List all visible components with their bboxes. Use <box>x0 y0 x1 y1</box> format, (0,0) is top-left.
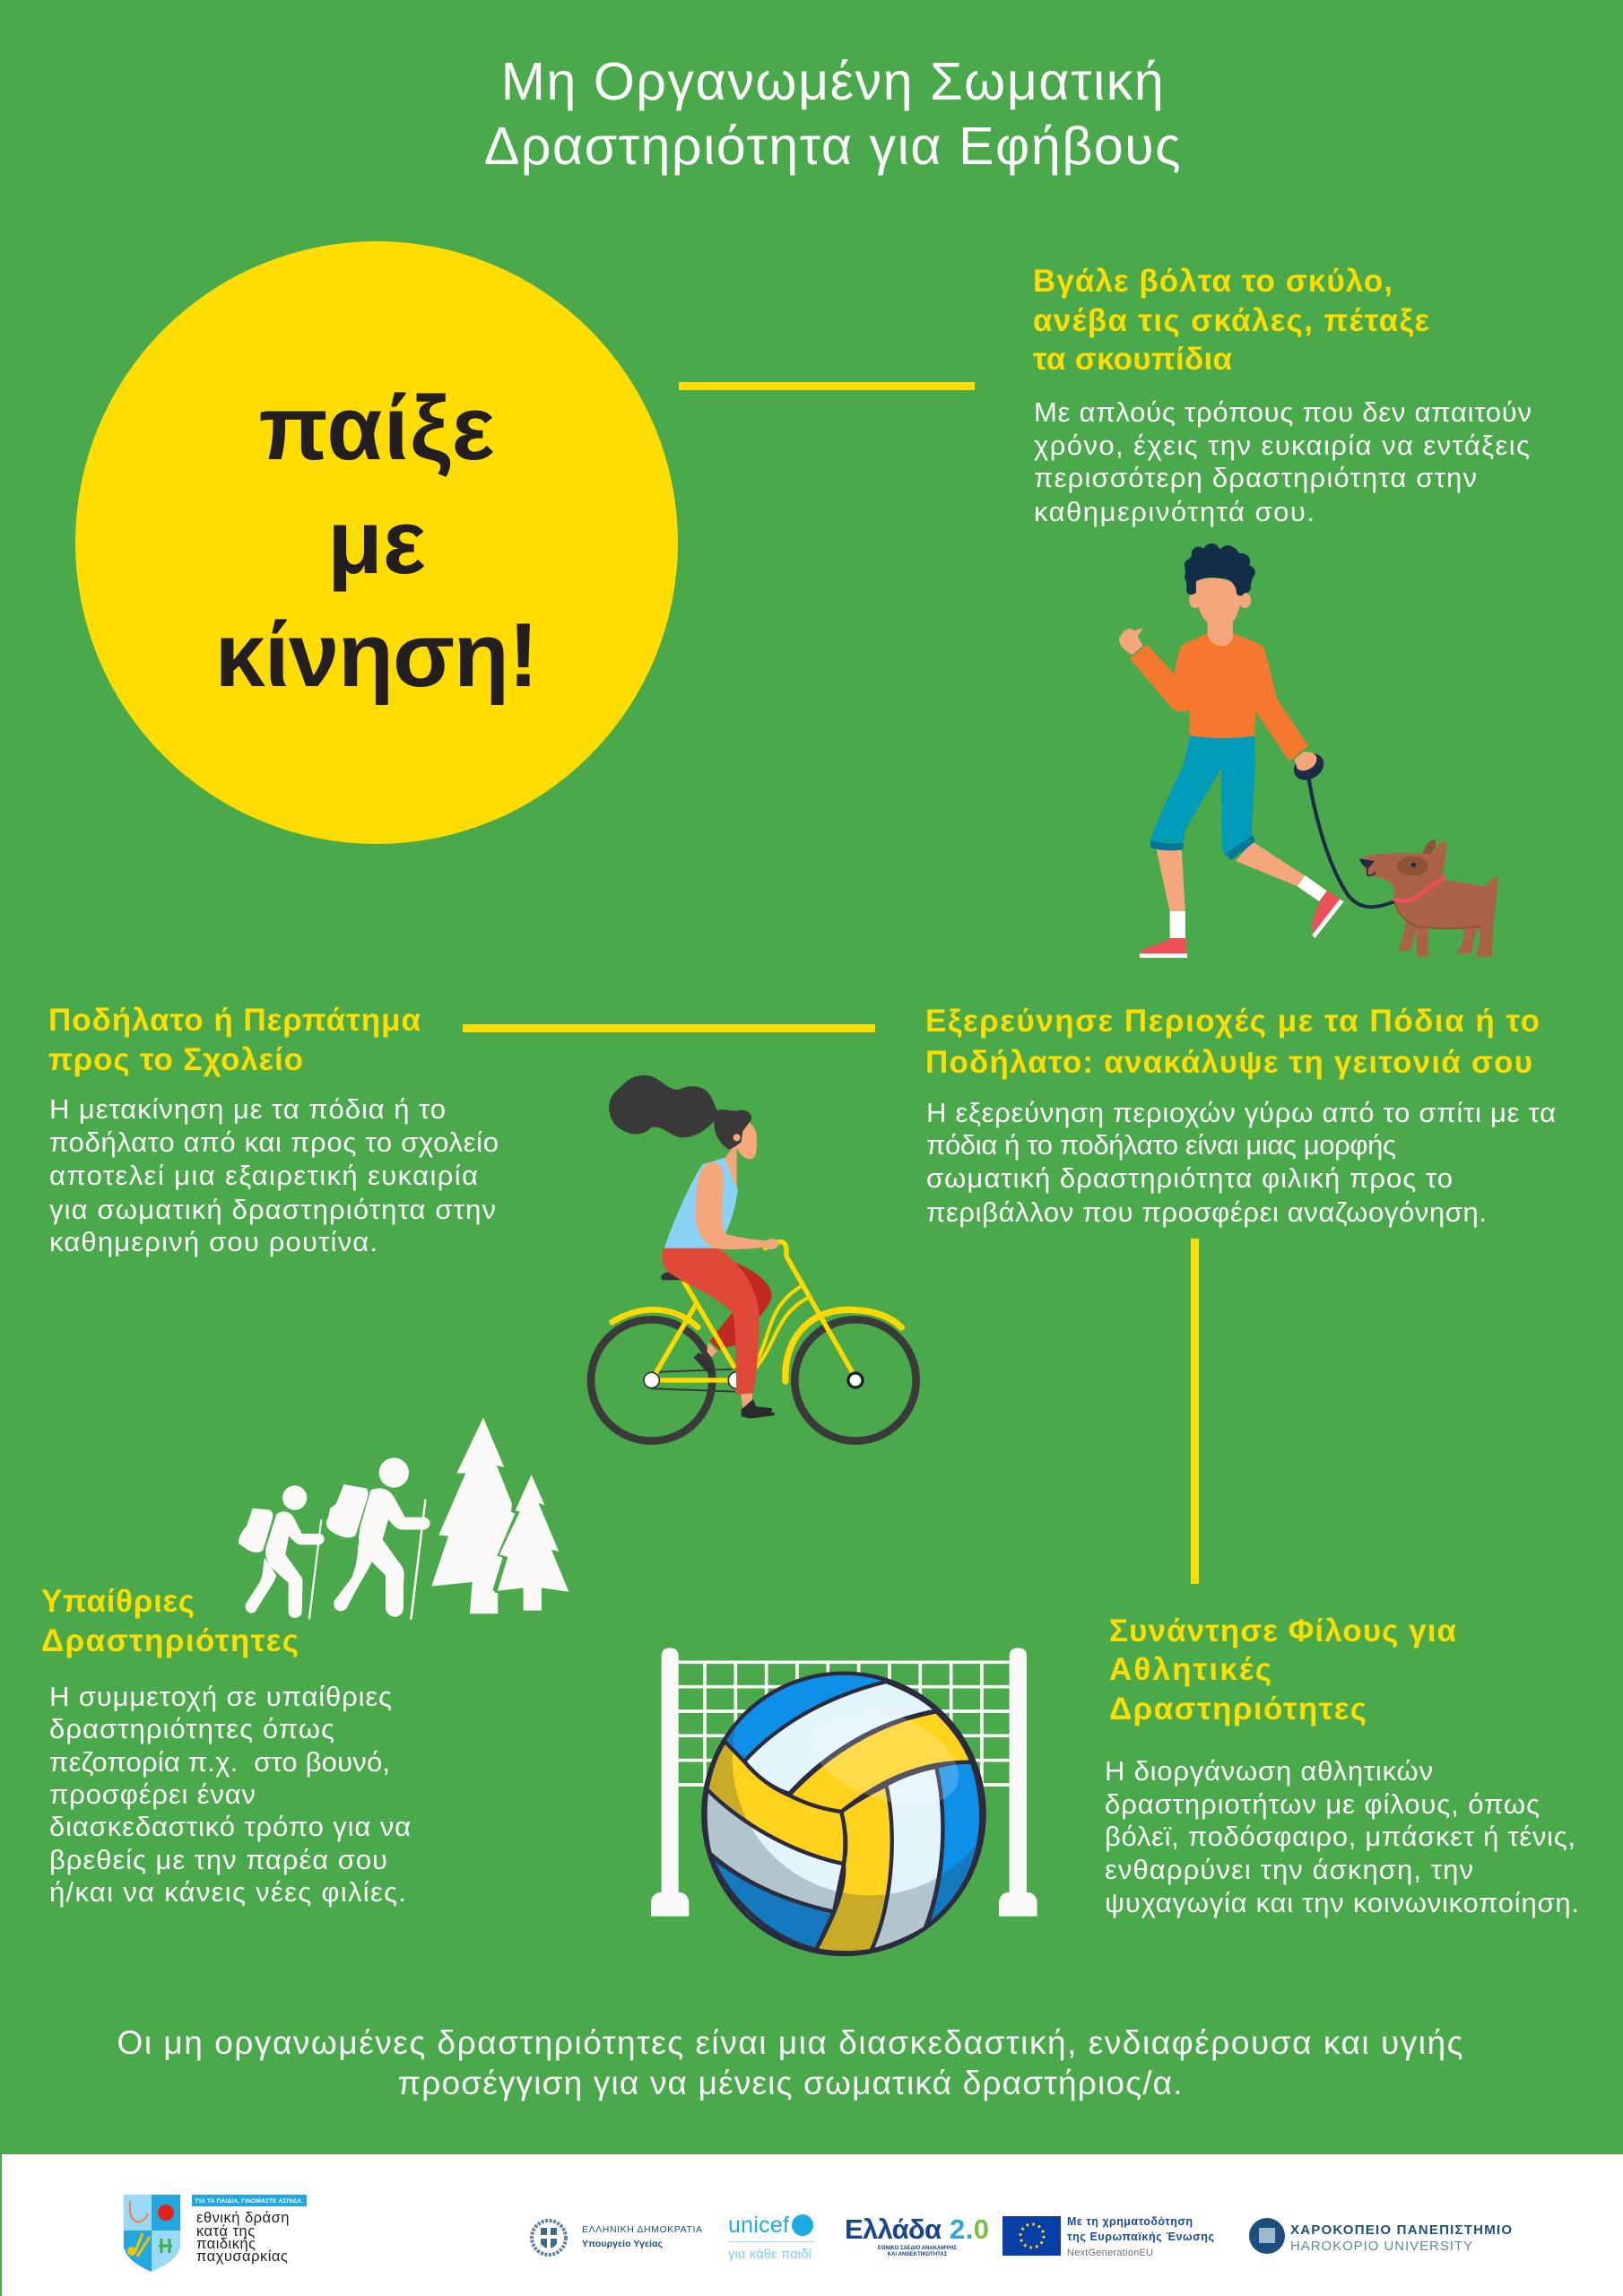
connector line: circle to walk the dog <box>679 382 975 390</box>
heading: sports with friends <box>1109 1613 1456 1726</box>
small hiker <box>282 1485 307 1510</box>
logo: ministry of health text: ΕΛΛΗΝΙΚΗ ΔΗΜΟΚΡΑΤΙΑ <box>582 2224 702 2235</box>
yellow circle headline: κίνηση! <box>215 605 538 706</box>
head and arm skin <box>1208 616 1233 646</box>
logo: EU funding text <box>1067 2215 1214 2258</box>
title <box>484 52 1182 176</box>
legs <box>1157 849 1185 912</box>
heading: outdoor activities <box>41 1584 299 1658</box>
logo: unicef <box>728 2213 814 2262</box>
text block: outdoor activities: πεζοπορία π.χ. στο βουνό, <box>49 1746 390 1778</box>
icon: volleyball and net <box>651 1648 1037 1957</box>
logo: national action text <box>192 2195 307 2265</box>
text block: outdoor activities: διασκεδαστικό τρόπο για να <box>49 1811 411 1842</box>
hair <box>609 1075 751 1150</box>
large hiker <box>379 1457 409 1488</box>
heading: walk the dog: Βγάλε βόλτα το σκύλο, <box>1033 264 1393 299</box>
text block: cycling to school: καθημερινή σου ρουτίνα. <box>49 1226 378 1257</box>
closing statement: Οι μη οργανωμένες δραστηριότητες είναι μια διασκεδαστική, ενδιαφέρουσα και υγιής <box>117 2024 1463 2061</box>
text block: sports with friends: ενθαρρύνει την άσκηση, την <box>1105 1854 1473 1885</box>
heading: sports with friends: Συνάντησε Φίλους για <box>1109 1613 1456 1648</box>
text block: sports with friends <box>1105 1755 1579 1918</box>
text block: outdoor activities: βρεθείς με την παρέα σου <box>49 1844 387 1875</box>
text block: explore neighbourhood: πόδια ή το ποδήλατο είναι μιας μορφής <box>926 1129 1396 1161</box>
logo: Harokopio text <box>1290 2222 1512 2254</box>
panel: cycling or walking to school text <box>48 1003 499 1257</box>
footer band <box>2 2154 1623 2296</box>
heading: walk the dog: ανέβα τις σκάλες, πέταξε <box>1033 303 1429 338</box>
logo: Harokopio seal <box>1249 2218 1285 2254</box>
saddle <box>661 1273 684 1280</box>
text block: outdoor activities <box>49 1681 411 1908</box>
icon: person walking a dog <box>1119 544 1497 958</box>
far leg <box>710 1258 772 1350</box>
title: Δραστηριότητα για Εφήβους <box>484 117 1182 176</box>
logo: EU funding text: Με τη χρηματοδότηση <box>1067 2215 1193 2228</box>
heading: explore neighbourhood: Ποδήλατο: ανακάλυψε τη γειτονιά σου <box>925 1045 1532 1080</box>
text block: walk the dog <box>1034 396 1532 527</box>
text block: explore neighbourhood: Η εξερεύνηση περιοχών γύρω από το σπίτι με τα <box>926 1097 1556 1128</box>
logo: ministry of health text <box>582 2224 702 2249</box>
text block: explore neighbourhood: σωματική δραστηριότητα φιλική προς το <box>926 1162 1453 1194</box>
logo: ministry of health text: Υπουργείο Υγείας <box>582 2239 664 2249</box>
logo: Harokopio text: HAROKOPIO UNIVERSITY <box>1290 2239 1472 2254</box>
icon: hikers and trees <box>239 1418 570 1620</box>
text block: walk the dog: Με απλούς τρόπους που δεν απαιτούν <box>1034 396 1532 428</box>
text block: walk the dog: χρόνο, έχεις την ευκαιρία να εντάξεις <box>1034 430 1530 461</box>
text block: sports with friends: βόλεϊ, ποδόσφαιρο, μπάσκετ ή τένις, <box>1105 1821 1575 1852</box>
text block: sports with friends: Η διοργάνωση αθλητικών <box>1105 1755 1433 1787</box>
heading: explore neighbourhood <box>925 1004 1540 1080</box>
closing statement <box>117 2024 1463 2101</box>
panel: explore neighbourhood text <box>925 1004 1556 1228</box>
heading: walk the dog: τα σκουπίδια <box>1033 342 1232 377</box>
logo: unicef: για κάθε παιδί <box>728 2247 812 2262</box>
logo: national action shield <box>124 2195 180 2272</box>
logo: national action text: παχυσαρκίας <box>196 2248 288 2265</box>
logo: national action text: εθνική δράση <box>196 2210 290 2226</box>
text block: explore neighbourhood: περιβάλλον που προσφέρει αναζωογόνηση. <box>926 1196 1487 1228</box>
near leg <box>741 1392 752 1408</box>
heading: walk the dog <box>1033 264 1429 377</box>
shirt <box>1130 633 1308 761</box>
text block: outdoor activities: δραστηριότητες όπως <box>49 1713 334 1744</box>
panel: outdoor activities text <box>41 1584 411 1908</box>
panel: sports with friends text <box>1105 1613 1579 1918</box>
heading: sports with friends: Δραστηριότητες <box>1109 1692 1367 1726</box>
title: Μη Οργανωμένη Σωματική <box>501 52 1165 111</box>
text block: sports with friends: δραστηριοτήτων με φίλους, όπως <box>1105 1788 1540 1820</box>
hair <box>1185 544 1255 596</box>
logo: national action text: κατά της <box>196 2223 256 2239</box>
closing statement: προσέγγιση για να μένεις σωματικά δραστήριος/α. <box>398 2065 1182 2101</box>
heading: cycling to school: προς το Σχολείο <box>48 1042 303 1077</box>
heading: cycling to school: Ποδήλατο ή Περπάτημα <box>48 1003 421 1038</box>
text block: walk the dog: περισσότερη δραστηριότητα στην <box>1034 462 1477 493</box>
text block: outdoor activities: Η συμμετοχή σε υπαίθριες <box>49 1681 392 1712</box>
text block: walk the dog: καθημερινότητά σου. <box>1034 496 1315 527</box>
heading: explore neighbourhood: Εξερεύνησε Περιοχές με τα Πόδια ή το <box>925 1004 1540 1039</box>
icon: girl on bicycle <box>591 1075 916 1441</box>
text block: cycling to school <box>49 1093 499 1257</box>
text block: explore neighbourhood <box>926 1097 1556 1228</box>
logo: EU flag <box>1002 2216 1061 2256</box>
heading: sports with friends: Αθλητικές <box>1109 1652 1271 1687</box>
heading: cycling to school <box>48 1003 421 1077</box>
logo: Greece 2.0: ΕΘΝΙΚΟ ΣΧΕΔΙΟ ΑΝΑΚΑΜΨΗΣ <box>878 2246 957 2251</box>
connector line: cycling to explore <box>463 1024 875 1032</box>
large tree <box>431 1418 515 1613</box>
text block: outdoor activities: ή/και να κάνεις νέες φιλίες. <box>49 1876 406 1908</box>
logo: Greece 2.0 <box>845 2213 989 2257</box>
frame <box>612 1242 901 1381</box>
yellow circle headline <box>75 241 678 844</box>
logo: EU funding text: της Ευρωπαϊκής Ένωσης <box>1067 2231 1214 2243</box>
panel: walk the dog text <box>1033 264 1532 527</box>
text block: cycling to school: για σωματική δραστηριότητα στην <box>49 1194 496 1225</box>
small tree <box>496 1473 570 1612</box>
heading: outdoor activities: Υπαίθριες <box>41 1584 195 1619</box>
head <box>735 1122 757 1160</box>
yellow circle headline: με <box>327 492 426 593</box>
text block: cycling to school: Η μετακίνηση με τα πόδια ή το <box>49 1093 446 1125</box>
logo: national action text: παιδικής <box>196 2236 256 2252</box>
logo: EU funding text: NextGenerationEU <box>1067 2248 1153 2258</box>
logo: Greece 2.0: Ελλάδα <box>845 2213 942 2245</box>
hand and leash handle <box>1289 748 1329 786</box>
dog <box>1422 839 1436 857</box>
torso <box>664 1158 738 1248</box>
yellow circle headline: παίξε <box>258 378 495 479</box>
logo: national action text: ΓΙΑ ΤΑ ΠΑΙΔΙΑ, ΓΙΝΟΜΑΣΤΕ ΑΣΠΙΔΑ. <box>195 2198 303 2205</box>
text block: cycling to school: ποδήλατο από και προς το σχολείο <box>49 1126 499 1158</box>
logo: Harokopio text: ΧΑΡΟΚΟΠΕΙΟ ΠΑΝΕΠΙΣΤΗΜΙΟ <box>1290 2222 1512 2238</box>
connector line: explore to sports <box>1191 1239 1199 1584</box>
text block: outdoor activities: προσφέρει έναν <box>49 1779 256 1810</box>
text block: cycling to school: αποτελεί μια εξαιρετική ευκαιρία <box>49 1160 478 1191</box>
logo: Hellenic Republic emblem <box>532 2221 566 2255</box>
logo: Greece 2.0: ΚΑΙ ΑΝΘΕΚΤΙΚΟΤΗΤΑΣ <box>888 2252 948 2257</box>
heading: outdoor activities: Δραστηριότητες <box>41 1623 299 1658</box>
text block: sports with friends: ψυχαγωγία και την κοινωνικοποίηση. <box>1105 1887 1579 1918</box>
logo: Greece 2.0: 2.0 <box>950 2213 989 2245</box>
logo: unicef: unicef <box>728 2213 789 2238</box>
shorts <box>1150 736 1255 857</box>
